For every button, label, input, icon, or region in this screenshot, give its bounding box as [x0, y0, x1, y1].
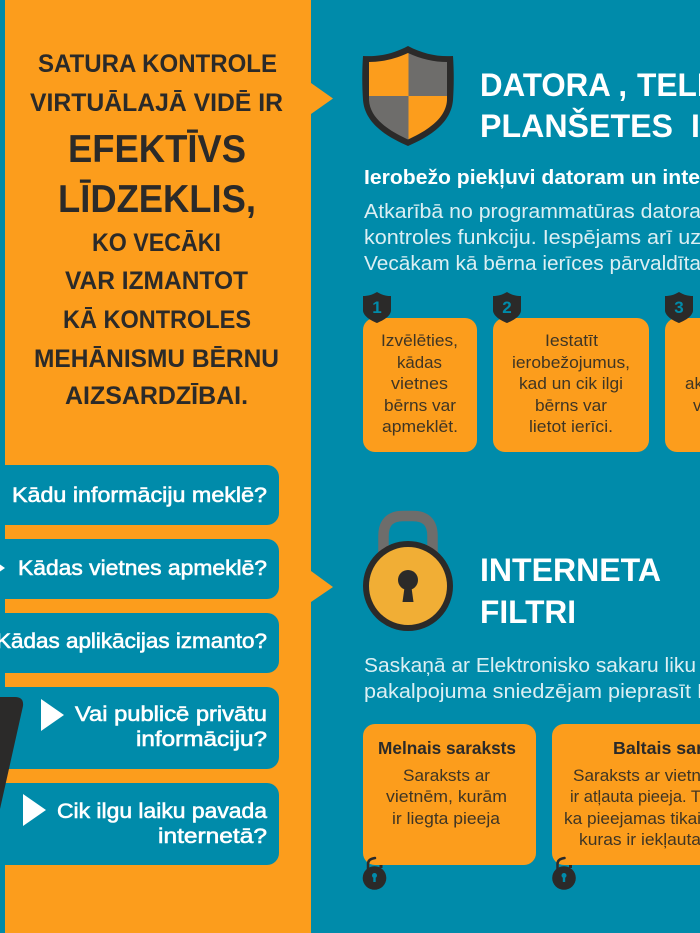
step card 2: ierobežojumus,	[512, 353, 630, 372]
step card 1: Izvēlēties,	[381, 331, 458, 350]
question pill 5: internetā?	[158, 825, 267, 848]
step card 1: apmeklēt.	[382, 417, 458, 436]
heading: left column statement	[30, 50, 283, 410]
card: whitelist: Baltais sar	[613, 738, 700, 758]
title: device settings: I	[691, 108, 700, 144]
title: device settings	[480, 67, 700, 144]
subheading: limit access: Ierobežo piekļuvi datoram un inte	[364, 167, 700, 189]
card: whitelist: ka pieejamas tikai	[564, 809, 700, 828]
question pill 1: Kādu informāciju meklē?	[12, 484, 267, 507]
card: blacklist: vietnēm, kurām	[386, 787, 507, 806]
step card 2: Iestatīt	[545, 331, 598, 350]
step card 1: vietnes	[391, 374, 448, 393]
heading: left column statement: SATURA KONTROLE	[38, 50, 277, 78]
card: blacklist: Melnais saraksts	[378, 738, 516, 758]
step card 2: lietot ierīci.	[529, 417, 613, 436]
question pill 5: Cik ilgu laiku pavada	[57, 800, 267, 823]
text block: device paragraph: Atkarībā no programmatūras datora	[364, 201, 700, 223]
title: internet filters	[480, 552, 661, 630]
step card 1	[363, 292, 477, 452]
text block: device paragraph: kontroles funkciju. Iespējams arī uz	[364, 227, 700, 249]
heading: left column statement: EFEKTĪVS	[68, 128, 246, 171]
heading: left column statement: KĀ KONTROLES	[63, 306, 251, 334]
card: whitelist	[552, 724, 700, 865]
icon: open lock left	[363, 858, 386, 890]
step card 2	[493, 292, 649, 452]
question pill 5	[0, 783, 279, 865]
question pill 4	[0, 687, 279, 769]
step card 3: 3	[674, 298, 684, 317]
title: internet filters: INTERNETA	[480, 552, 661, 588]
step card 2: 2	[502, 298, 512, 317]
panel: orange column	[5, 0, 333, 933]
step card 2: kad un cik ilgi	[519, 374, 623, 393]
text block: filters paragraph: pakalpojuma sniedzējam pieprasīt	[364, 681, 691, 703]
question pill 1	[0, 465, 279, 525]
text block: device paragraph	[364, 201, 700, 275]
question pill 3: Kādas aplikācijas izmanto?	[0, 630, 267, 653]
title: device settings: DATORA ,	[480, 67, 627, 103]
text block: filters paragraph	[364, 655, 700, 703]
text block: device paragraph: Vecākam kā bērna ierīces pārvaldīta	[364, 253, 700, 275]
step card 3	[665, 292, 700, 452]
card: whitelist: kuras ir iekļauta	[579, 830, 700, 849]
phone silhouette	[0, 697, 23, 815]
text block: filters paragraph: Saskaņā ar Elektronisko sakaru liku	[364, 655, 696, 677]
heading: left column statement: VIRTUĀLAJĀ VIDĒ IR	[30, 89, 283, 117]
heading: left column statement: LĪDZEKLIS,	[58, 178, 256, 221]
icon: padlock	[366, 516, 450, 628]
step card 1: bērns var	[384, 396, 456, 415]
step card 1: 1	[372, 298, 382, 317]
card: blacklist	[363, 724, 536, 865]
question pill 4: informāciju?	[136, 728, 267, 751]
step card 2: bērns var	[535, 396, 607, 415]
card: blacklist: ir liegta pieeja	[392, 809, 501, 828]
title: device settings: PLANŠETES	[480, 108, 673, 144]
question pill 3	[0, 613, 279, 673]
title: internet filters: FILTRI	[480, 594, 576, 630]
step card 1: kādas	[397, 353, 442, 372]
heading: left column statement: KO VECĀKI	[92, 229, 221, 257]
card: whitelist: Saraksts ar vietn	[573, 766, 700, 785]
card: blacklist: Saraksts ar	[403, 766, 490, 785]
icon: shield	[362, 46, 454, 146]
icon: open lock right	[552, 858, 576, 890]
heading: left column statement: AIZSARDZĪBAI.	[65, 382, 248, 410]
question pill 2: Kādas vietnes apmeklē?	[18, 557, 267, 580]
heading: left column statement: MEHĀNISMU BĒRNU	[34, 345, 279, 373]
question pill 2	[0, 539, 279, 599]
question pill 4: Vai publicē privātu	[75, 703, 267, 726]
heading: left column statement: VAR IZMANTOT	[65, 267, 248, 295]
